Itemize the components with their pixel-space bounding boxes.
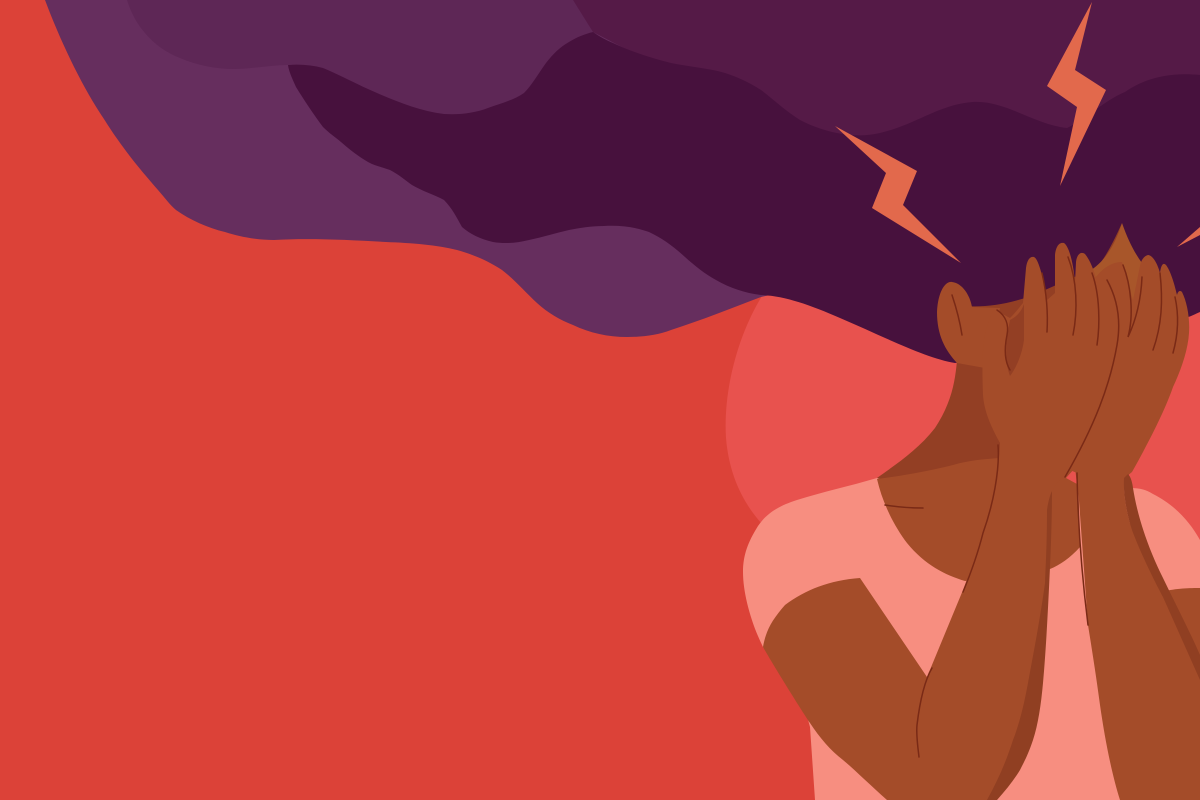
edge of left hand [1065, 280, 1119, 477]
thumb line [997, 310, 1010, 370]
ear and face [937, 282, 1000, 368]
hair: light purple layer [45, 0, 1200, 337]
ear line [952, 295, 962, 335]
elbow line [917, 668, 932, 757]
skin crease lines [885, 257, 1177, 757]
hair: dark upper layer [573, 0, 1200, 200]
shirt [743, 470, 1200, 800]
right upper arm [1160, 588, 1200, 690]
chest [877, 458, 1080, 581]
right wrist line [1077, 473, 1088, 625]
neck line [885, 505, 923, 508]
wrist gap [1066, 468, 1077, 484]
finger lines right hand [1123, 265, 1142, 337]
hair: darkest layer [288, 32, 1200, 363]
lightning bolt right [1177, 227, 1200, 247]
hair: mid purple layer [127, 0, 593, 114]
left forearm shadow band [985, 470, 1067, 800]
right arm shadow [1124, 474, 1200, 680]
pink circle behind head [726, 290, 1200, 560]
left arm and hand [763, 243, 1120, 800]
neck and face shadow [877, 223, 1122, 520]
finger lines left hand [1042, 273, 1047, 332]
right arm and hand [1070, 255, 1200, 800]
left arm line [963, 445, 998, 592]
left hand shadow patch [1006, 304, 1024, 376]
lightning bolt top [1047, 2, 1106, 186]
lightning bolt left [835, 126, 961, 263]
forehead highlight [1088, 223, 1142, 340]
